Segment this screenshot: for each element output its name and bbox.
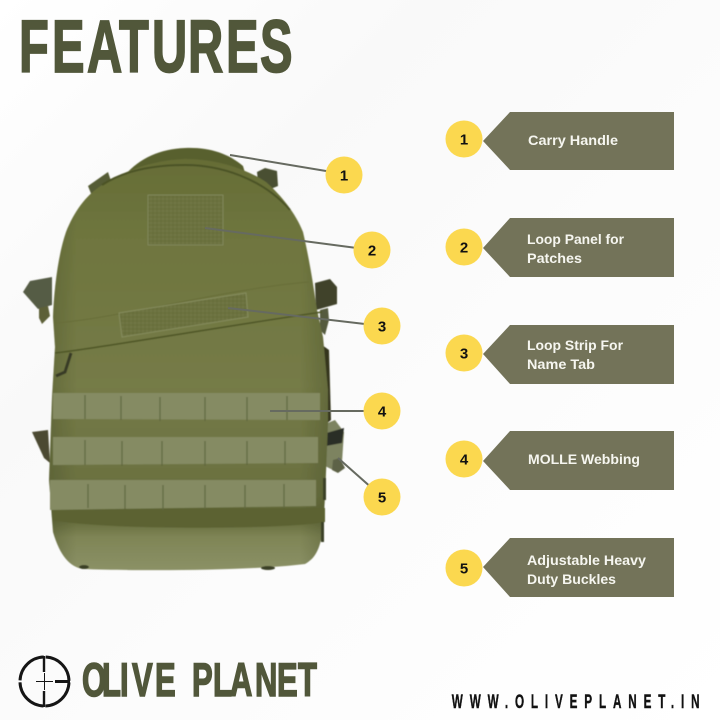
feature 5: buckles: Adjustable Heavy — [527, 552, 646, 568]
pointer line 1 — [230, 155, 344, 174]
feature 4: MOLLE webbing — [446, 431, 674, 490]
marker 2: 2 — [368, 242, 376, 260]
feature 1: carry handle: 1 — [460, 132, 468, 148]
feature 3: loop strip: 3 — [460, 346, 468, 362]
feature 2: loop panel — [446, 218, 674, 277]
marker 2 — [354, 232, 390, 268]
feature 3: loop strip: Loop Strip For — [527, 337, 624, 353]
feature 2: loop panel: Loop Panel for — [527, 231, 625, 247]
pointer line 3 — [228, 308, 382, 326]
feature 3: loop strip: Name Tab — [527, 356, 595, 372]
marker 1 — [326, 156, 362, 194]
marker 3 — [364, 308, 400, 344]
lower shadow — [52, 508, 325, 528]
website url: WWW.OLIVEPLANET.IN — [452, 691, 700, 713]
MOLLE webbing — [50, 393, 320, 510]
zipper pull — [56, 353, 71, 376]
top zipper seam — [102, 165, 290, 210]
marker 3: 3 — [378, 318, 386, 336]
loop panel — [148, 195, 223, 245]
feature 5: buckles — [446, 538, 674, 597]
feature 4: MOLLE webbing: 4 — [460, 452, 469, 468]
main body — [49, 159, 328, 570]
marker 4: 4 — [378, 404, 387, 420]
backpack photo — [23, 148, 345, 570]
side straps and buckles — [23, 168, 345, 473]
pointer line 5 — [338, 458, 382, 497]
pointer line 4 — [270, 410, 382, 412]
pointer line 2 — [205, 228, 372, 250]
feature 3: loop strip — [446, 325, 674, 384]
feature 2: loop panel: Patches — [527, 250, 582, 266]
feature 1: carry handle — [446, 112, 674, 170]
logo icon: crosshair — [20, 656, 70, 707]
marker 5: 5 — [378, 490, 386, 506]
feature 1: carry handle: Carry Handle — [528, 132, 618, 148]
title: FEATURES — [19, 6, 293, 89]
feature 2: loop panel: 2 — [460, 240, 468, 256]
marker 4 — [364, 392, 400, 430]
feature 4: MOLLE webbing: MOLLE Webbing — [528, 451, 640, 467]
loop strip — [119, 293, 248, 337]
marker 5 — [364, 478, 400, 516]
feature 5: buckles: Duty Buckles — [527, 571, 616, 587]
top handle — [120, 148, 250, 190]
feature 5: buckles: 5 — [460, 560, 468, 578]
pocket flap seams — [55, 312, 322, 353]
marker 1: 1 — [340, 168, 348, 184]
logo wordmark: OLIVE PLANET — [82, 655, 317, 707]
